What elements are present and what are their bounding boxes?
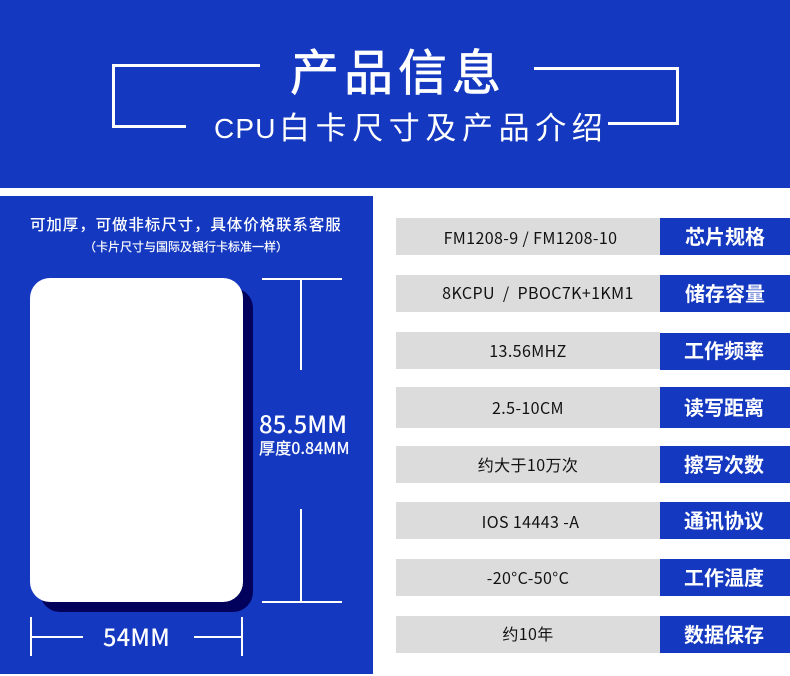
thickness label: 厚度0.84MM	[259, 435, 350, 459]
row: temperature: -20°C-50°C	[487, 565, 569, 589]
row: distance: 2.5-10CM	[492, 395, 564, 419]
row: retention: 数据保存	[684, 619, 764, 648]
row: retention: 约10年	[502, 621, 554, 645]
width label: 54MM	[103, 619, 170, 653]
row: capacity: 储存容量	[685, 278, 765, 307]
right bracket	[534, 67, 679, 125]
row: frequency	[396, 332, 790, 370]
subtitle	[214, 103, 608, 148]
panel: card size	[0, 196, 373, 674]
row: chip: FM1208-9 / FM1208-10	[444, 225, 617, 249]
row: distance	[396, 387, 790, 428]
row: temperature: 工作温度	[684, 562, 764, 591]
card shadow	[40, 288, 253, 612]
row: chip	[396, 218, 790, 255]
row: capacity: 8KCPU / PBOC7K+1KM1	[442, 280, 634, 304]
note heading: 可加厚，可做非标尺寸，具体价格联系客服	[30, 213, 342, 235]
spec table	[396, 218, 790, 653]
header band	[0, 0, 790, 188]
row: frequency: 13.56MHZ	[489, 338, 567, 362]
height label: 85.5MM	[259, 405, 347, 440]
subtitle chinese part: 白卡尺寸及产品介绍	[279, 103, 608, 148]
row: capacity	[396, 275, 790, 312]
subtitle latin part: CPU	[214, 113, 277, 144]
row: protocol: 通讯协议	[684, 505, 764, 534]
row: frequency: 工作频率	[684, 335, 764, 364]
height dimension	[259, 278, 350, 603]
row: erase cycles: 约大于10万次	[478, 452, 578, 476]
note subheading: （卡片尺寸与国际及银行卡标准一样）	[84, 238, 288, 255]
white card	[30, 278, 243, 602]
row: protocol: IOS 14443 -A	[482, 509, 579, 533]
row: erase cycles	[396, 446, 790, 483]
row: chip: 芯片规格	[685, 221, 765, 250]
title: 产品信息	[290, 34, 506, 105]
row: erase cycles: 擦写次数	[684, 449, 764, 478]
row: distance: 读写距离	[684, 392, 764, 421]
row: protocol	[396, 502, 790, 539]
left bracket	[112, 64, 260, 128]
